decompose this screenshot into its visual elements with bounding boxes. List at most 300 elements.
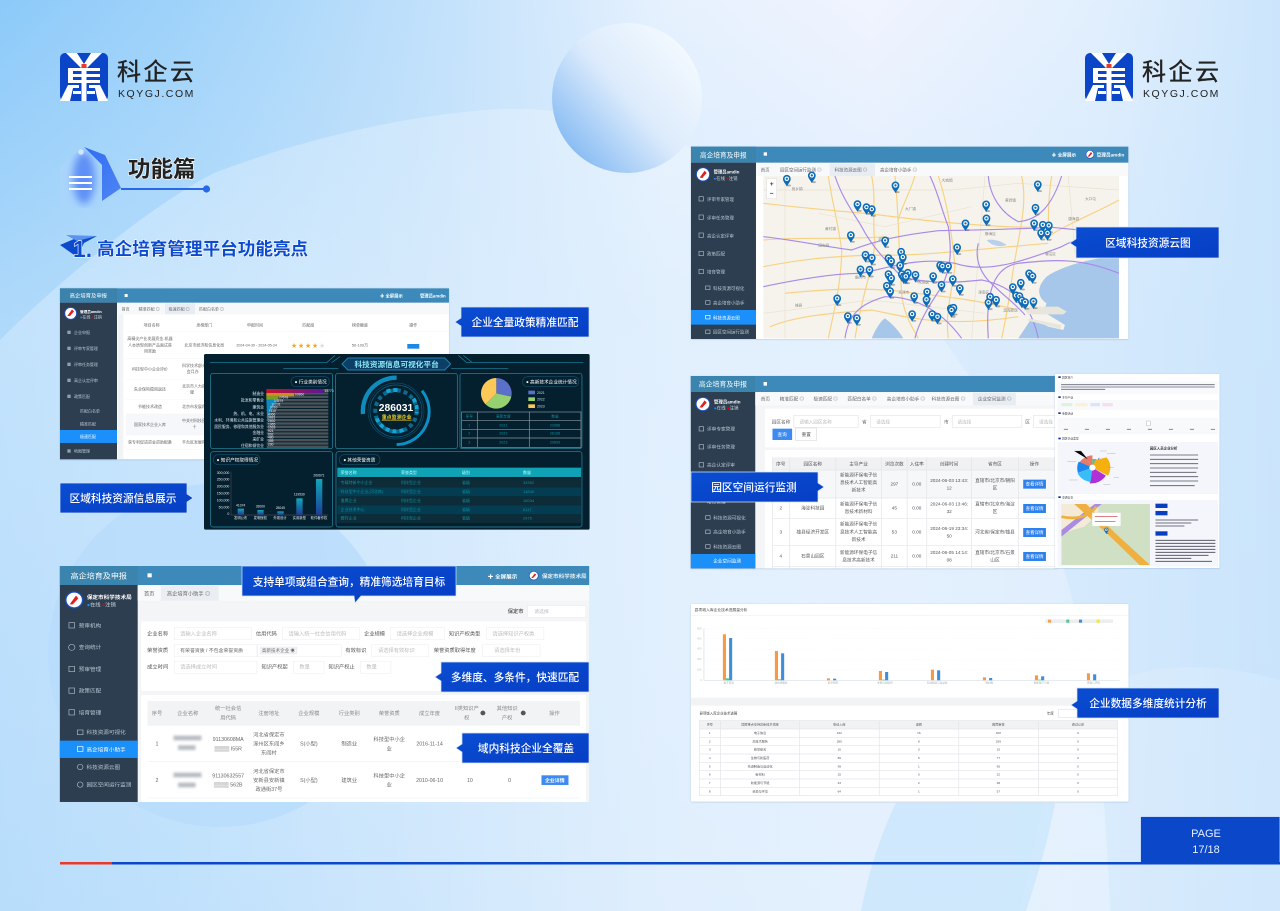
park table: 浏览次数: [885, 460, 904, 467]
panel: enterprise assistant screenshot: 科技资源可视化: [86, 728, 126, 736]
IP bar chart: 119530: [294, 493, 305, 497]
honors table: 科技型中小企业(河北库): [341, 488, 384, 494]
callout: park monitoring: [691, 472, 824, 502]
data table: 2: [709, 739, 711, 743]
panel: policy matching screenshot: ★★★★★: [291, 344, 326, 350]
map: 霸州市: [855, 274, 866, 279]
park table: 息技术人工智能高: [840, 529, 878, 536]
results table: 安新县安新镇: [253, 776, 285, 784]
data table: 38: [997, 781, 1000, 785]
filter card: 请输入企业名称: [180, 629, 217, 637]
data table: 77: [997, 756, 1000, 760]
industry bar chart: 13773: [324, 389, 334, 393]
map: 武清镇: [878, 236, 890, 241]
industry bar chart: 采矿业: [253, 437, 264, 442]
IP bar chart: 200,000: [217, 485, 229, 489]
panel: statistics screenshot: 县项城入库企业技术进展: [699, 711, 738, 716]
data table: 退回: [916, 722, 922, 727]
park table: 创建时间: [940, 460, 959, 467]
IP bar chart: [213, 455, 328, 520]
footer rule: [60, 862, 1280, 864]
panel: enterprise assistant screenshot: 培育管理: [79, 708, 102, 716]
heading underline with dot: [121, 185, 210, 193]
icon: document tag: [68, 147, 121, 208]
park table: 区: [993, 485, 998, 490]
section title: 1.: [73, 236, 92, 262]
data table: 生物与新医药: [751, 755, 769, 760]
park table: 0.00: [912, 554, 922, 559]
high-tech pie chart: [462, 377, 581, 447]
industry bar chart: ● 行业类别情况: [295, 379, 327, 386]
honors table: ● 其他荣誉资质: [343, 457, 376, 464]
park table: 2: [779, 506, 782, 511]
IP bar chart: 发明公布: [234, 515, 248, 520]
honors table: 6117: [523, 507, 532, 512]
park table: 操作: [1030, 460, 1039, 467]
filter card: 高新技术企业 ◉: [262, 647, 296, 654]
high-tech pie chart: 2023: [537, 405, 545, 409]
panel: resource cloud map screenshot: 科技资源云图: [713, 314, 740, 321]
honors table: 省级: [462, 515, 470, 521]
panel: park monitoring screenshot: 园区名称: [772, 418, 791, 425]
map: 大城镇: [942, 177, 953, 182]
bar chart: 生物与新医药: [877, 681, 893, 685]
panel: enterprise assistant screenshot: 高企培育小助手 ◎: [167, 589, 210, 597]
panel: park monitoring screenshot: 企业空间监测: [713, 558, 742, 565]
industry bar chart: [214, 377, 334, 448]
filter card: 知识产权止: [329, 663, 355, 671]
bar chart: 先进制造与自动化: [927, 681, 948, 685]
bar chart: 100: [697, 667, 702, 671]
industry bar chart: 建筑业: [253, 404, 264, 409]
park table: 2024-06-05 14:14:: [930, 550, 968, 555]
panel: policy matching screenshot: 北京市人力资源和社会: [182, 382, 222, 388]
honors table: 33352: [523, 480, 535, 485]
results table: 企业详情: [545, 777, 565, 784]
results table: II类知识产: [455, 704, 479, 712]
filter card: 请选择企业规模: [397, 629, 433, 637]
map: 固安县: [818, 243, 830, 248]
panel: resource cloud map screenshot: 评审专家管理: [707, 196, 734, 203]
callout: enterprise coverage: [456, 733, 589, 763]
honors table: 数量: [523, 469, 531, 475]
panel: policy matching screenshot: 获专利促进资金资助配备: [128, 438, 172, 444]
callout: multi-dimension: [435, 662, 589, 692]
panel: policy matching screenshot: 匹配白名单 ◎: [199, 305, 224, 311]
park table: 主导产业: [849, 460, 868, 467]
data table: 0: [1077, 789, 1079, 793]
results table: 业: [387, 781, 392, 789]
data table: 先进制造与自动化: [748, 763, 772, 768]
data table: 4: [709, 756, 711, 760]
honors table: 科技型企业: [401, 479, 421, 485]
data table: 高技术服务: [752, 738, 768, 743]
park table: 息技术新材料: [845, 508, 873, 515]
honors table: 瞪羚企业: [341, 515, 357, 521]
dashboard title: 科技资源信息可视化平台: [355, 359, 439, 369]
IP bar chart: 0: [227, 512, 229, 516]
panel: policy matching screenshot: 节能技术改造: [138, 403, 162, 409]
honors table: 级别: [462, 469, 470, 475]
data table: 57: [997, 789, 1000, 793]
panel: enterprise assistant screenshot: 高企培育小助手: [86, 745, 126, 753]
data table: 43: [838, 781, 841, 785]
results table: 2010-06-10: [416, 778, 443, 784]
map: 黄骅镇: [1005, 198, 1016, 203]
honors table: 14840: [523, 489, 535, 494]
logo left: KQYGJ.COM: [118, 88, 195, 100]
park table: 2024-06-03 13:46:: [930, 502, 968, 507]
results table: 政通街37号: [255, 785, 282, 793]
results table: 荣誉资质: [379, 709, 400, 717]
panel: park monitoring screenshot: 高企培育及申报: [699, 380, 747, 389]
honors table: 企业技术中心: [341, 506, 365, 512]
panel: enterprise assistant screenshot: 保定市科学技术局: [87, 593, 132, 601]
IP bar chart: 外观设计: [273, 515, 287, 520]
results table: 制造业: [341, 739, 357, 747]
filter card: 有荣誉资质 / 不包含荣誉资质: [180, 647, 243, 654]
panel: park monitoring screenshot: 请选择: [1039, 418, 1053, 425]
data table: 400: [996, 731, 1001, 735]
panel: policy matching screenshot: 服: [190, 389, 194, 395]
industry bar chart: 14579: [274, 399, 283, 403]
panel: park monitoring screenshot: 高企培育小助手: [713, 529, 746, 536]
park table: 新技术: [852, 486, 866, 493]
panel: policy matching screenshot: 匹配白名单: [80, 408, 100, 414]
filter card: 数量: [299, 663, 310, 671]
page number box: 17/18: [1192, 844, 1220, 856]
map: 塘沽区: [1045, 251, 1056, 256]
park table: 0.00: [912, 506, 922, 511]
panel: policy matching screenshot: 丰台区发展和改革委员会: [182, 438, 226, 444]
panel: enterprise assistant screenshot: [60, 566, 589, 802]
park table: 直辖市/北京市/石景: [975, 549, 1015, 556]
data table: 259: [996, 739, 1001, 743]
honors table: 科技型企业: [401, 488, 421, 494]
dashboard title: [210, 355, 583, 370]
high-tech pie chart: 1: [468, 423, 470, 427]
panel: park detail document: 主导产业: [1062, 395, 1073, 399]
panel: policy matching screenshot: 操作: [409, 321, 417, 327]
map: 大口屯: [1085, 196, 1096, 201]
panel: policy matching screenshot: ●在线 ●注销: [80, 314, 102, 320]
panel: policy matching screenshot: 评审任务管理: [74, 361, 98, 367]
industry bar chart: 7110: [269, 409, 276, 413]
data table: 0: [918, 773, 920, 777]
data table: 99: [838, 764, 841, 768]
park table: 211: [891, 554, 899, 559]
park table: 海淀科技园: [801, 505, 825, 512]
park table: 直辖市/北京市/朝阳: [975, 477, 1015, 484]
data table: 442: [837, 731, 842, 735]
data table: 2: [918, 781, 920, 785]
bar chart: 500: [697, 626, 702, 630]
map: 黄村镇: [825, 226, 836, 231]
panel: park monitoring screenshot: [691, 376, 1056, 568]
panel: enterprise assistant screenshot: 高企培育及申报: [71, 571, 127, 581]
high-tech pie chart: 2022: [499, 432, 507, 436]
decorative circle: [552, 23, 702, 173]
filter card: 荣誉资质: [147, 646, 168, 654]
panel: resource cloud map screenshot: [691, 147, 1128, 339]
panel: policy matching screenshot: 评审专家管理: [74, 345, 98, 351]
industry bar chart: 692: [268, 432, 274, 436]
panel: policy matching screenshot: 十: [193, 423, 197, 429]
data table: 8: [709, 789, 711, 793]
panel: resource cloud map screenshot: 管理员amdin: [1097, 151, 1124, 158]
industry bar chart: 1965: [268, 422, 276, 426]
data table: 1: [709, 731, 711, 735]
industry bar chart: 3881: [268, 416, 276, 420]
filter card: 请选择成立时间: [180, 663, 217, 671]
park table: 直辖市/北京市/海淀: [975, 501, 1015, 508]
industry bar chart: 921: [268, 429, 274, 433]
callout: policy matching: 企业全量政策精准匹配: [472, 316, 579, 329]
map: 唐海县: [1068, 216, 1080, 221]
data table: 95: [997, 764, 1000, 768]
panel: policy matching screenshot: 会月办: [187, 368, 199, 374]
high-tech pie chart: 高新年度: [496, 414, 511, 419]
panel: policy matching screenshot: 用奖励: [144, 348, 156, 354]
park table: 新能源环保电子信: [840, 472, 878, 479]
panel: resource cloud map screenshot: 管理员amdin: [714, 169, 740, 176]
high-tech pie chart: 2022: [537, 398, 545, 402]
data table: 0: [1077, 748, 1079, 752]
data table: 新材料: [755, 772, 765, 777]
central gauge: 重点监测企业: [382, 414, 412, 421]
panel: park monitoring screenshot: 培育管理: [707, 498, 726, 505]
IP bar chart: 25045: [276, 506, 285, 510]
park table: 50: [947, 533, 952, 538]
results table: 91130632557: [212, 774, 244, 780]
honors table: 2975: [523, 516, 533, 521]
callout: regional info display: 区域科技资源信息展示: [70, 492, 177, 505]
bar chart: 高技术服务: [775, 681, 788, 685]
results table: S(小型): [300, 739, 318, 747]
IP bar chart: 150,000: [217, 492, 229, 496]
high-tech pie chart: ● 高新技术企业统计情况: [526, 379, 577, 386]
panel: park monitoring screenshot: 企业空间监测 ◎: [978, 396, 1012, 403]
panel: park monitoring screenshot: 区: [1025, 419, 1030, 424]
park table: 息技术高新技术: [842, 556, 875, 563]
high-tech pie chart: 2021: [537, 391, 545, 395]
high-tech pie chart: 数量: [551, 414, 559, 419]
results table: [141, 695, 586, 802]
park table: 息技术人工智能高: [840, 479, 878, 486]
panel: policy matching screenshot: 榜单额度: [352, 321, 368, 327]
panel: park monitoring screenshot: 评审专家管理: [707, 426, 735, 433]
data table: 推荐审核: [992, 722, 1005, 727]
results table: 建筑业: [341, 776, 357, 784]
high-tech pie chart: 29839: [550, 440, 560, 444]
callout: regional info display: [60, 483, 193, 513]
industry bar chart: 355: [268, 439, 274, 443]
industry bar chart: 批发和零售业: [241, 398, 264, 403]
panel: resource cloud map screenshot: 首页: [761, 166, 770, 173]
IP bar chart: 软件著作权: [311, 515, 328, 520]
map: 滨海新区: [1003, 308, 1018, 313]
panel: resource cloud map screenshot: 园区空间运行监测: [713, 329, 749, 336]
data table: 资源与环境: [752, 788, 768, 793]
park table: 4: [779, 554, 782, 559]
panel: policy matching screenshot: 申报时间: [247, 321, 263, 327]
park table: 08: [947, 557, 952, 562]
IP bar chart: 50,000: [219, 505, 229, 509]
panel: statistics screenshot: 县项城入库企业技术进展量分析: [695, 607, 748, 612]
filter card: [141, 621, 586, 691]
panel: enterprise assistant screenshot: 预审机构: [79, 621, 102, 629]
data table: 通过认定: [1072, 722, 1084, 727]
park table: 新能源环保电子信: [840, 521, 878, 528]
filter card: 企业名称: [147, 629, 168, 637]
panel: policy matching screenshot: [60, 288, 449, 459]
data table: [699, 721, 1118, 796]
panel: park monitoring screenshot: 科技资源云图 ◎: [932, 396, 966, 403]
honors table: 雏鹰企业: [341, 497, 357, 503]
data table: 3: [709, 748, 711, 752]
panel: enterprise assistant screenshot: 请选择: [534, 608, 549, 615]
panel: park monitoring screenshot: 查询: [777, 431, 787, 438]
park table: 3: [779, 530, 782, 535]
park table: 2024-06-03 13:43:: [930, 478, 968, 483]
data table: 16: [838, 748, 841, 752]
honors table: 专精特新中小企业: [341, 479, 373, 485]
IP bar chart: 实用新型: [293, 515, 307, 520]
panel: enterprise assistant screenshot: 保定市: [508, 607, 524, 615]
results table: ▒▒▒▒ I55R: [214, 745, 242, 752]
IP bar chart: 发明授权: [254, 515, 268, 520]
industry bar chart: 10231: [271, 402, 281, 406]
results table: 科技型中小企: [373, 735, 405, 743]
data table: 16: [917, 731, 921, 735]
park table: 新技术: [852, 536, 866, 543]
central gauge: 286031: [379, 403, 413, 414]
honors table: 省级: [462, 506, 470, 512]
park table: 雄县经济开发区: [797, 529, 829, 536]
panel: park monitoring screenshot: 高企培育小助手 ◎: [887, 396, 926, 403]
filter card: 知识产权类型: [449, 629, 480, 637]
industry bar chart: 2892: [268, 419, 276, 423]
panel: park monitoring screenshot: 高企认定评审: [707, 462, 735, 469]
panel: park monitoring screenshot: 管理员amdin: [714, 398, 741, 405]
filter card: 知识产权起: [262, 663, 288, 671]
data table: 1: [918, 764, 920, 768]
panel: policy matching screenshot: 匹配度: [302, 321, 314, 327]
honors table: 省级: [462, 479, 470, 485]
data table: 22: [997, 773, 1000, 777]
industry bar chart: 60860: [295, 392, 304, 396]
panel: policy matching screenshot: 50-100万: [352, 343, 368, 348]
honors table: 省级: [462, 488, 470, 494]
filter card: 请选择知识产权类: [492, 629, 534, 637]
map: 天津市: [898, 289, 910, 294]
data table: 89: [838, 756, 841, 760]
callout: enterprise coverage: 域内科技企业全覆盖: [478, 742, 574, 755]
heading: 功能篇: 功能篇: [128, 157, 196, 182]
panel: policy matching screenshot: 人本质型创新产品面试首: [128, 341, 172, 347]
panel: policy matching screenshot: 管理员amdin: [420, 292, 446, 299]
panel: park monitoring screenshot: 请输入园区名称: [799, 418, 832, 425]
panel: park detail document: 园区简介: [1062, 375, 1073, 379]
bar chart: 新材料: [986, 681, 994, 685]
results table: 企业名称: [177, 709, 198, 717]
mini map: [1061, 504, 1150, 565]
panel: policy matching screenshot: 极速匹配: [80, 433, 96, 439]
panel: enterprise assistant screenshot: 首页: [144, 589, 155, 597]
IP bar chart: 33000: [256, 505, 265, 509]
panel: park monitoring screenshot: 市: [944, 418, 949, 425]
results table: 涿州区东阎乡: [253, 739, 285, 747]
park table: 河北省/保定市/雄县: [975, 529, 1015, 536]
results table: 2016-11-14: [416, 741, 443, 747]
map: 津南区: [978, 289, 990, 294]
data table: 新能源与节能: [751, 780, 769, 785]
logo right: 科企云: [1142, 59, 1222, 86]
data table: 7: [709, 781, 711, 785]
industry bar chart: 4966: [268, 412, 276, 416]
panel: resource cloud map screenshot: 高企培育小助手 ◎: [880, 166, 918, 173]
panel: resource cloud map screenshot: 政策匹配: [707, 251, 725, 258]
logo left: [60, 53, 196, 101]
panel: policy matching screenshot: 精准匹配 ◎: [139, 305, 160, 311]
IP bar chart: 41074: [236, 504, 245, 508]
park table: 45: [892, 506, 897, 511]
panel: enterprise assistant screenshot: 保定市科学技术局: [542, 572, 587, 580]
panel: policy matching screenshot: 科学技术部火炬中心: [182, 362, 218, 368]
map: 良乡镇: [792, 186, 803, 191]
industry bar chart: 27678: [279, 396, 288, 400]
panel: enterprise assistant screenshot: 政策匹配: [79, 687, 102, 695]
honors table: 科技型企业: [401, 506, 421, 512]
map: +: [770, 181, 774, 188]
park table: 省市区: [988, 460, 1002, 467]
park table: 区: [993, 509, 998, 514]
industry bar chart: 住宿和餐饮业: [241, 443, 264, 448]
panel: park detail document: [1055, 374, 1220, 568]
panel: policy matching screenshot: 北京市发展和改革委员会: [182, 403, 226, 409]
high-tech pie chart: 2: [468, 432, 470, 436]
bar chart: [697, 626, 1120, 685]
industry bar chart: 200: [268, 442, 274, 446]
map: −: [770, 191, 774, 198]
panel: policy matching screenshot: 国家技术企业入库: [134, 421, 166, 427]
callout: combined query: [242, 566, 456, 603]
filter card: 请输入统一社会信用代码: [289, 629, 346, 637]
results table: 科技型中小企: [373, 772, 405, 780]
data table: 0: [1077, 781, 1079, 785]
results table: 企业规模: [298, 709, 319, 717]
section title: [60, 235, 309, 262]
high-tech pie chart: 3: [468, 440, 470, 444]
honors table: 10034: [523, 498, 535, 503]
panel: visualization dashboard: [204, 354, 590, 530]
map: 静海区: [985, 231, 996, 236]
industry bar chart: 480: [268, 436, 274, 440]
data table: 航空航天: [754, 747, 766, 752]
panel: enterprise assistant screenshot: 科技资源云图: [86, 763, 120, 771]
honors table: 荣誉名称: [341, 469, 357, 475]
page number box: [1140, 816, 1280, 864]
panel: park monitoring screenshot: 匹配白名单 ◎: [848, 396, 877, 403]
panel: park monitoring screenshot: 精准匹配 ◎: [780, 396, 805, 403]
panel: policy matching screenshot: 首页: [122, 305, 130, 311]
honors table: 科技型企业: [401, 497, 421, 503]
filter card: 请选择年份: [494, 646, 520, 654]
park table: 入住率: [910, 460, 924, 467]
park table: 2024-06-19 23:34:: [930, 526, 968, 531]
logo right: KQYGJ.COM: [1143, 88, 1220, 100]
industry bar chart: 制造业: [253, 391, 264, 396]
